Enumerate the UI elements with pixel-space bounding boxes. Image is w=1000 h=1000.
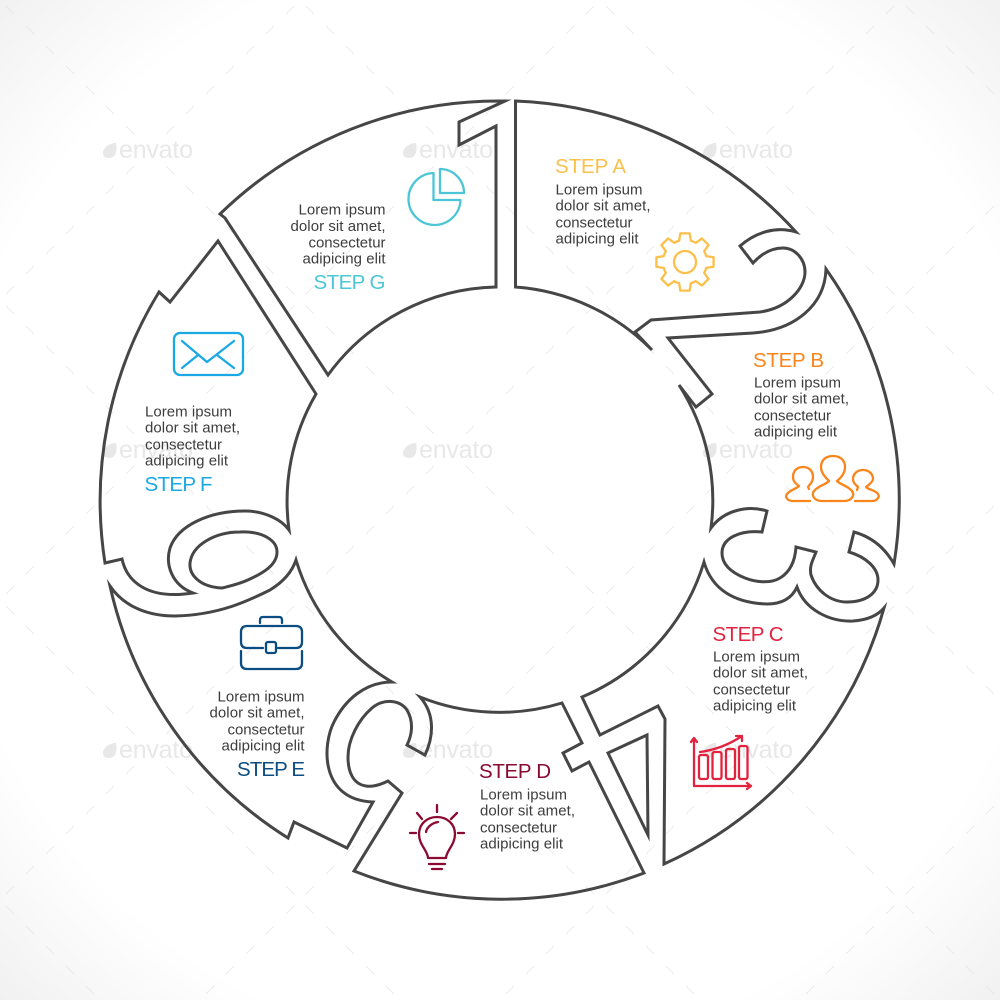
text block C	[713, 648, 808, 714]
segment outline B	[668, 269, 899, 602]
panel: step E	[110, 560, 392, 848]
panel: step G	[220, 101, 505, 375]
text block G	[290, 202, 386, 268]
watermark grid: envato	[419, 736, 493, 764]
numeral counter oval	[190, 532, 277, 588]
heading: step C: STEP C	[712, 623, 784, 646]
segment outline F	[100, 241, 316, 595]
watermark grid	[103, 136, 793, 764]
icon: gear	[656, 233, 714, 291]
numeral counter triangle	[608, 735, 648, 835]
text block D: Lorem ipsum	[480, 786, 567, 804]
panel: step C	[582, 562, 884, 864]
text block G: dolor sit amet,	[290, 218, 386, 235]
segment outline C	[582, 562, 884, 864]
text block B: Lorem ipsum	[754, 374, 841, 392]
text block A	[556, 182, 650, 248]
text block F: consectetur	[145, 436, 222, 454]
text block D: dolor sit amet,	[480, 802, 575, 820]
text block C: adipicing elit	[713, 698, 797, 714]
segment outline A	[516, 101, 805, 350]
text block F	[145, 404, 240, 470]
icon: envelope	[174, 333, 243, 375]
panel: step D	[348, 697, 644, 899]
text block F: Lorem ipsum	[145, 404, 232, 420]
heading: step D: STEP D	[479, 760, 551, 783]
text block B: dolor sit amet,	[754, 390, 849, 408]
text block F: dolor sit amet,	[145, 420, 240, 436]
text block D	[480, 786, 575, 852]
text block F: adipicing elit	[145, 452, 229, 470]
text block E: consectetur	[228, 722, 304, 738]
text block A: adipicing elit	[556, 230, 639, 248]
icon: people	[786, 456, 879, 501]
heading: step B: STEP B	[753, 349, 824, 372]
text block B	[754, 374, 849, 440]
text block E	[210, 688, 305, 754]
heading: step A: STEP A	[555, 155, 626, 178]
heading: step G: STEP G	[314, 271, 386, 294]
icon: light bulb	[410, 805, 464, 869]
segment outline D	[348, 697, 644, 899]
panel: step F	[100, 241, 316, 595]
panel: step B	[668, 269, 899, 602]
watermark grid: envato	[719, 136, 793, 164]
panel: step A	[516, 101, 805, 350]
text block C: Lorem ipsum	[713, 648, 800, 666]
text block A: dolor sit amet,	[556, 198, 650, 214]
text block D: consectetur	[480, 820, 557, 836]
watermark grid: envato	[119, 736, 193, 764]
watermark grid: envato	[119, 136, 193, 164]
text block C: dolor sit amet,	[713, 664, 808, 682]
watermark grid: envato	[419, 136, 493, 164]
watermark grid: envato	[719, 436, 793, 464]
text block C: consectetur	[713, 682, 790, 698]
text block A: Lorem ipsum	[556, 182, 642, 198]
text block G: Lorem ipsum	[298, 202, 386, 218]
text block B: consectetur	[754, 408, 831, 424]
text block B: adipicing elit	[754, 424, 838, 440]
segment outline G	[220, 101, 505, 375]
text block A: consectetur	[556, 214, 632, 232]
text block E: adipicing elit	[222, 738, 305, 754]
icon: briefcase	[241, 617, 302, 669]
text block G: adipicing elit	[302, 250, 386, 268]
icon: bar chart	[691, 736, 751, 789]
text block E: Lorem ipsum	[218, 688, 304, 706]
heading: step E: STEP E	[237, 758, 305, 781]
watermark grid: envato	[119, 436, 193, 464]
watermark grid: envato	[719, 736, 793, 764]
heading: step F: STEP F	[144, 473, 212, 496]
icon: pie chart	[409, 169, 464, 225]
text block G: consectetur	[308, 234, 386, 252]
text block D: adipicing elit	[480, 836, 564, 852]
segment outline E	[110, 560, 392, 848]
text block E: dolor sit amet,	[210, 704, 304, 722]
watermark grid: envato	[419, 436, 493, 464]
